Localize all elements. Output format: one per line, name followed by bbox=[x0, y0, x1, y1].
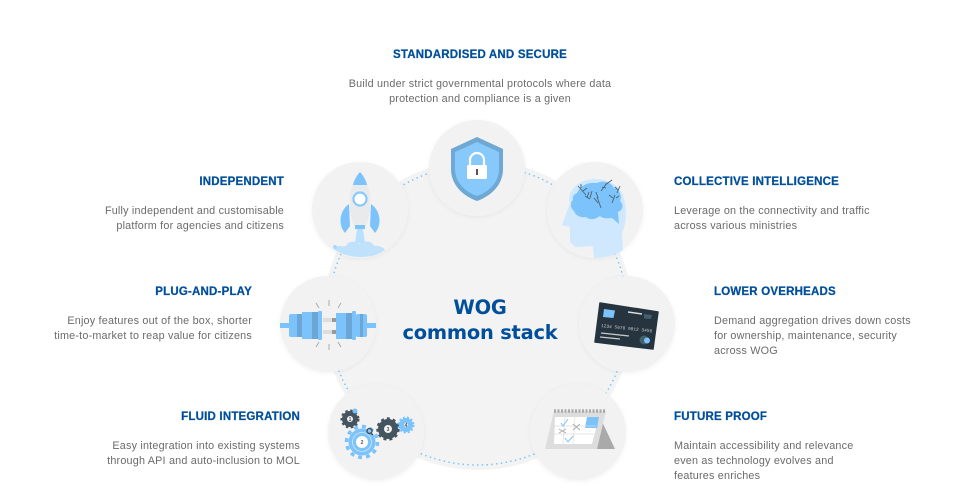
gear numbers: 1 bbox=[349, 417, 352, 423]
node: gears bbox=[328, 384, 424, 480]
gear numbers bbox=[349, 417, 408, 446]
block: plug-and-play: time-to-market to reap value for citizens bbox=[54, 330, 252, 342]
node: calendar bbox=[530, 384, 626, 480]
block: independent: INDEPENDENT bbox=[199, 176, 284, 188]
block: future proof bbox=[674, 411, 853, 482]
block: plug-and-play: PLUG-AND-PLAY bbox=[155, 286, 252, 298]
block: standardised and secure: STANDARDISED AND SECURE bbox=[393, 49, 567, 61]
gear numbers: 2 bbox=[361, 440, 364, 446]
block: lower overheads: LOWER OVERHEADS bbox=[714, 286, 836, 298]
block: lower overheads bbox=[714, 286, 911, 357]
card number: 1234 5678 9012 3456 bbox=[601, 323, 653, 334]
block: fluid integration: Easy integration into existing systems bbox=[112, 440, 300, 452]
center title: common stack bbox=[402, 321, 558, 344]
center title: WOG bbox=[453, 296, 507, 319]
block: lower overheads: Demand aggregation drives down costs bbox=[714, 315, 911, 327]
block: lower overheads: across WOG bbox=[714, 345, 778, 357]
block: future proof: FUTURE PROOF bbox=[674, 411, 767, 423]
block: fluid integration: through API and auto-inclusion to MOL bbox=[107, 455, 300, 467]
block: plug-and-play: Enjoy features out of the box, shorter bbox=[67, 315, 252, 327]
block: standardised and secure: Build under strict governmental protocols where data bbox=[349, 78, 611, 90]
block: future proof: features enriches bbox=[674, 470, 760, 482]
node: brain head bbox=[547, 162, 643, 258]
block: independent: Fully independent and customisable bbox=[105, 205, 284, 217]
block: plug-and-play bbox=[54, 286, 252, 342]
block: future proof: Maintain accessibility and relevance bbox=[674, 440, 853, 452]
dotted connector ring bbox=[328, 165, 628, 465]
block: future proof: even as technology evolves and bbox=[674, 455, 834, 467]
node: shield bbox=[429, 120, 525, 216]
gear numbers: 3 bbox=[387, 427, 390, 433]
node: credit card bbox=[579, 276, 675, 372]
block: collective intelligence: Leverage on the connectivity and traffic bbox=[674, 205, 870, 217]
block: fluid integration: FLUID INTEGRATION bbox=[181, 411, 300, 423]
block: standardised and secure bbox=[349, 49, 611, 105]
block: collective intelligence: COLLECTIVE INTELLIGENCE bbox=[674, 176, 839, 188]
block: independent bbox=[105, 176, 284, 232]
gear numbers: 4 bbox=[405, 423, 408, 429]
central hub circle bbox=[323, 160, 633, 470]
block: independent: platform for agencies and citizens bbox=[116, 220, 284, 232]
node: plug bbox=[280, 276, 376, 372]
block: collective intelligence: across various ministries bbox=[674, 220, 797, 232]
block: collective intelligence bbox=[674, 176, 870, 232]
node: rocket bbox=[312, 162, 408, 258]
block: fluid integration bbox=[107, 411, 300, 467]
center title bbox=[402, 296, 558, 344]
block: standardised and secure: protection and compliance is a given bbox=[389, 93, 571, 105]
block: lower overheads: for ownership, maintenance, security bbox=[714, 330, 897, 342]
